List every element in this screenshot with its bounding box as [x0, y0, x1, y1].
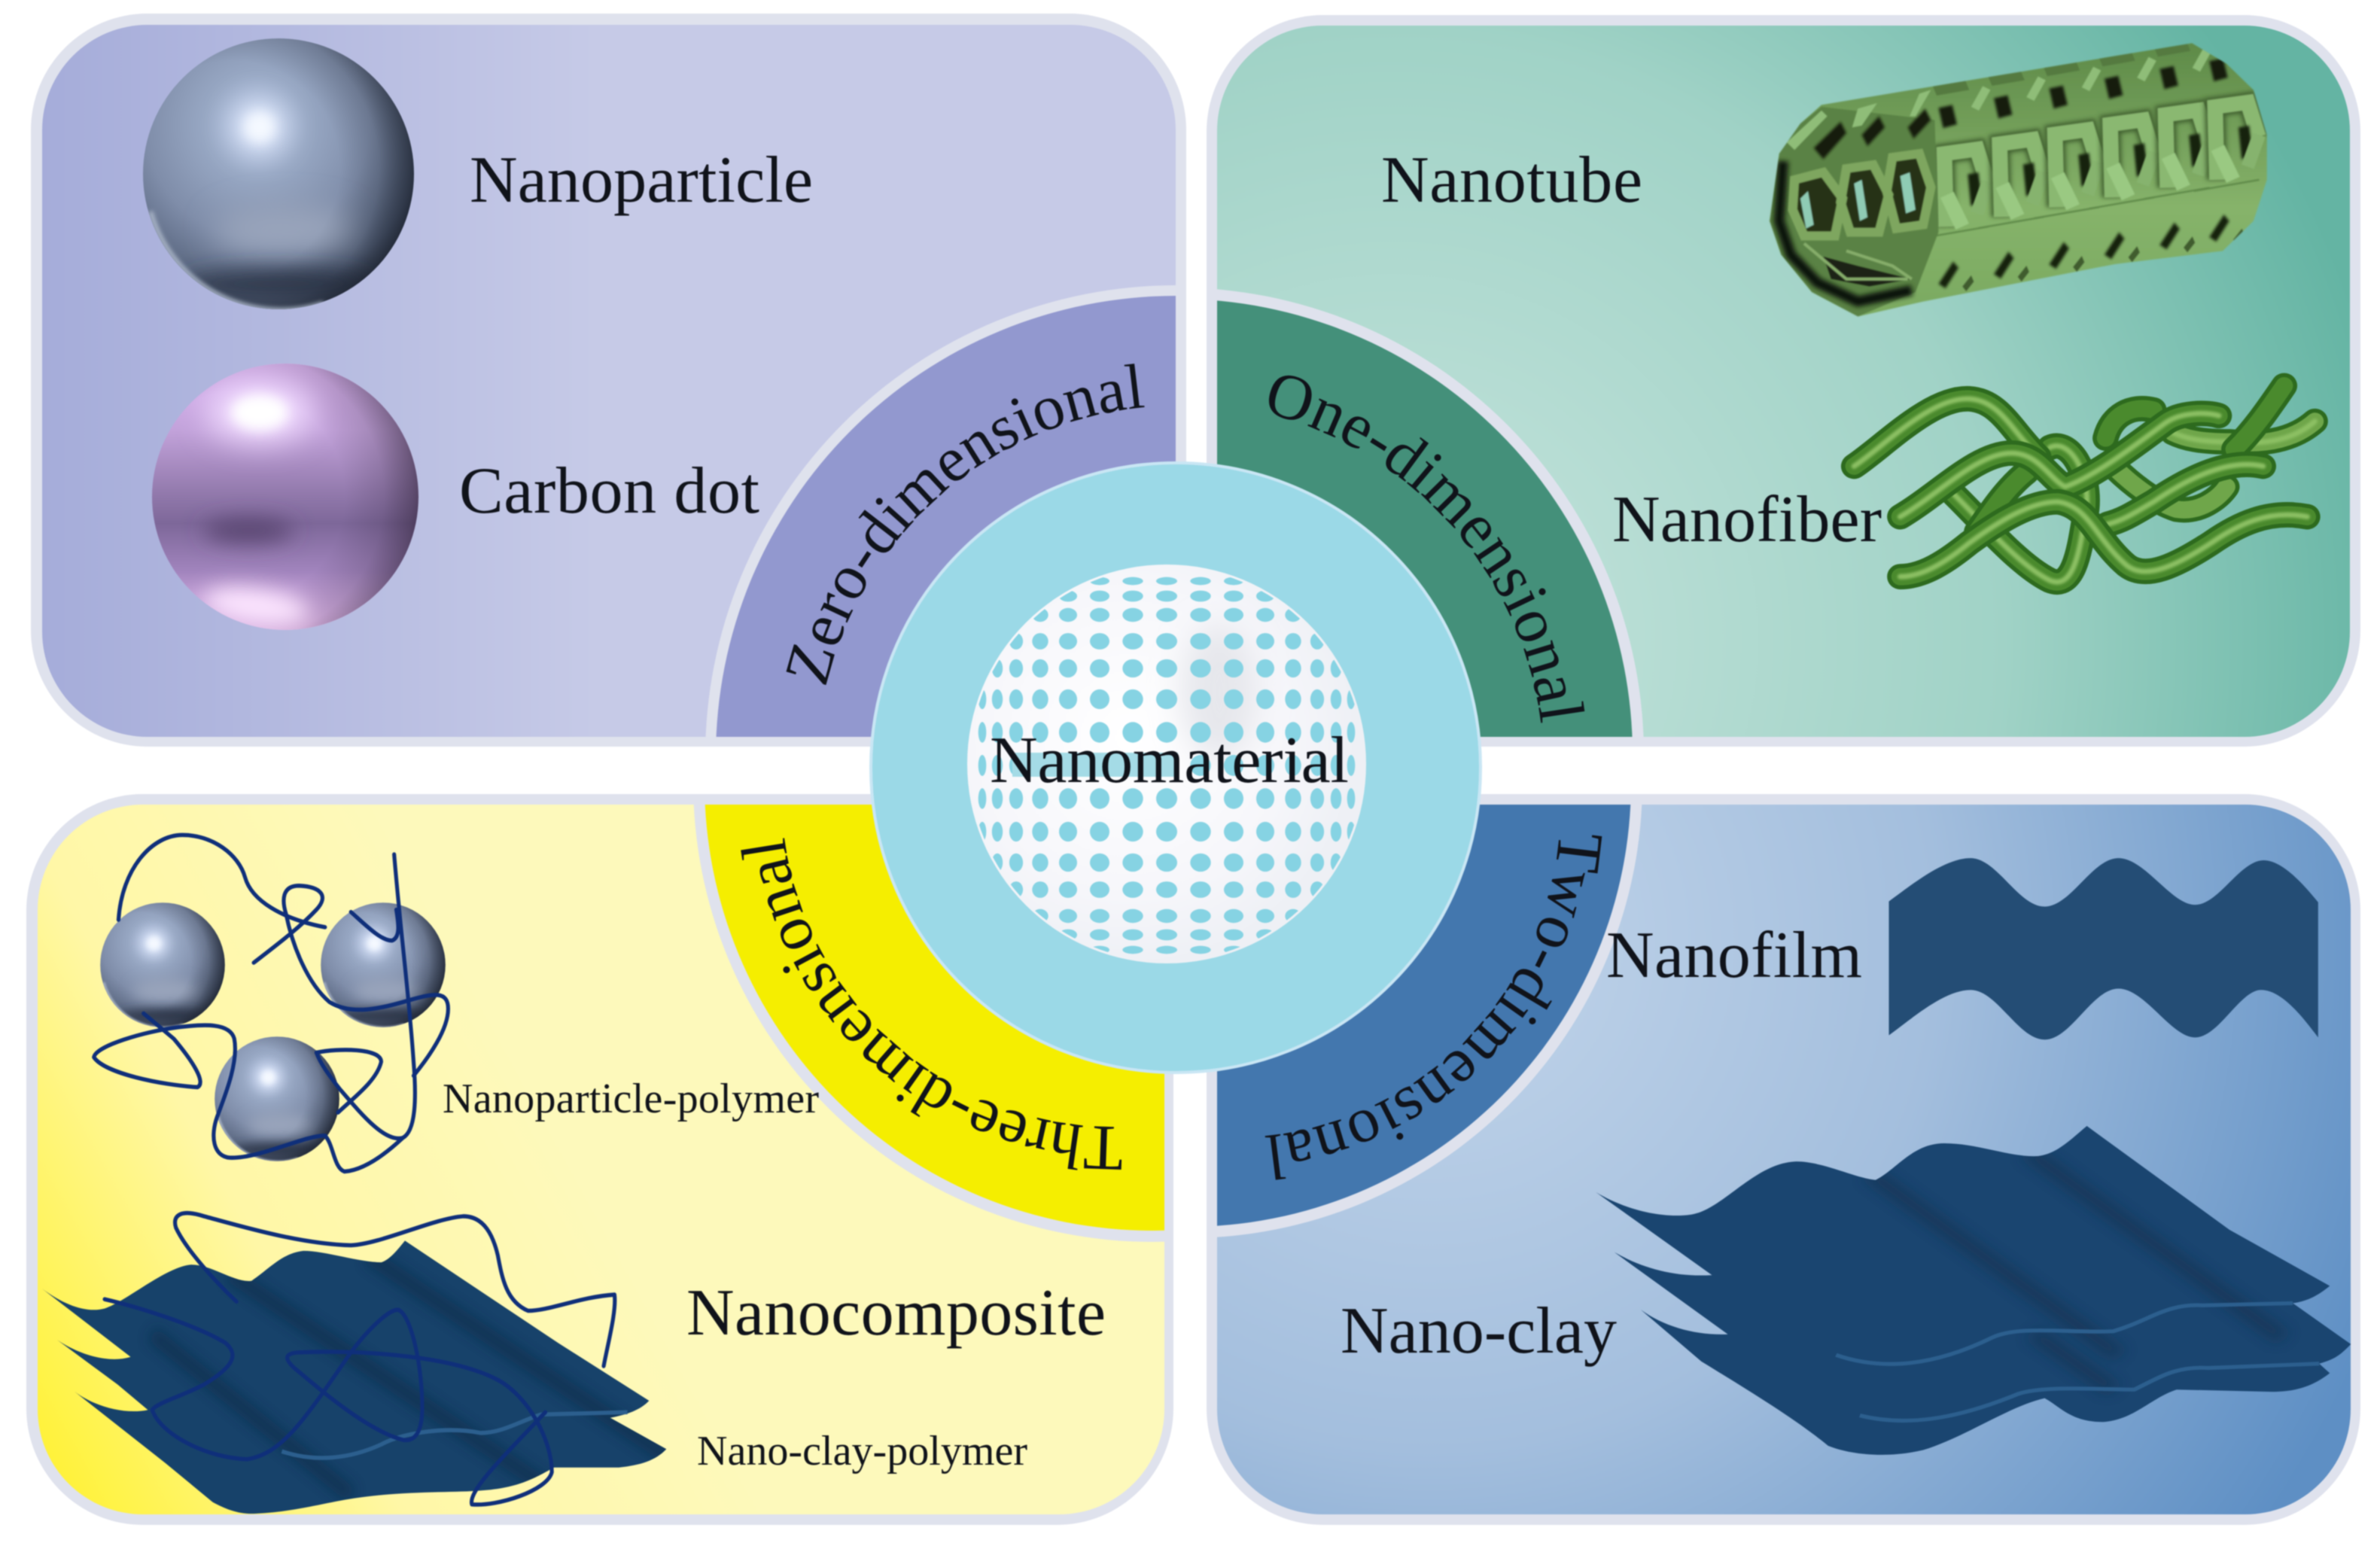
- nanoparticles: [100, 902, 446, 1161]
- icon: carbon dot sphere: [152, 364, 418, 630]
- panel: one-dimensional: [1206, 15, 2360, 747]
- label: Nanofilm: Nanofilm: [1606, 919, 1862, 992]
- panel: zero-dimensional: [30, 14, 1186, 747]
- nanotube end cap: [1770, 90, 1939, 316]
- icon: nanofiber: [1854, 385, 2315, 582]
- icon: nanotube: [1770, 34, 2267, 316]
- panel: three-dimensional: [26, 793, 1174, 1525]
- label: Nanotube: Nanotube: [1381, 144, 1642, 217]
- sector: one-dimensional: [1216, 289, 1644, 738]
- label: Nano-clay: Nano-clay: [1341, 1295, 1617, 1368]
- icon: nanoparticle-polymer: [94, 835, 448, 1172]
- label: Nanofiber: Nanofiber: [1612, 483, 1882, 556]
- label: Nanoparticle: Nanoparticle: [470, 144, 813, 217]
- sector: two-dimensional: [1216, 804, 1642, 1237]
- hub: central circle: [871, 463, 1481, 1073]
- icon: nanoparticle sphere: [143, 38, 414, 310]
- title: Nanomaterial: Nanomaterial: [990, 724, 1349, 797]
- label: Nano-clay-polymer: Nano-clay-polymer: [697, 1428, 1027, 1474]
- label: Nanoparticle-polymer: Nanoparticle-polymer: [443, 1076, 819, 1122]
- heading: One-dimensional: One-dimensional: [1268, 375, 1585, 724]
- icon: nano-clay: [1596, 1126, 2351, 1455]
- icon: nanofilm: [1888, 858, 2318, 1039]
- heading: Three-dimensional: Three-dimensional: [740, 837, 1123, 1171]
- panel: two-dimensional: [1206, 793, 2360, 1525]
- icon: nano-clay-polymer: [42, 1213, 671, 1514]
- sector: three-dimensional: [693, 804, 1165, 1242]
- nanotube body cells: [1923, 34, 2261, 291]
- polymer chain on clay: [105, 1213, 615, 1505]
- heading: Two-dimensional: Two-dimensional: [1265, 834, 1603, 1180]
- label: Carbon dot: Carbon dot: [459, 455, 759, 528]
- sector: zero-dimensional: [706, 285, 1176, 738]
- icon: dotted ball: [967, 565, 1366, 963]
- polymer chain: [94, 835, 448, 1172]
- heading: Zero-dimensional: Zero-dimensional: [786, 363, 1146, 686]
- label: Nanocomposite: Nanocomposite: [686, 1277, 1106, 1350]
